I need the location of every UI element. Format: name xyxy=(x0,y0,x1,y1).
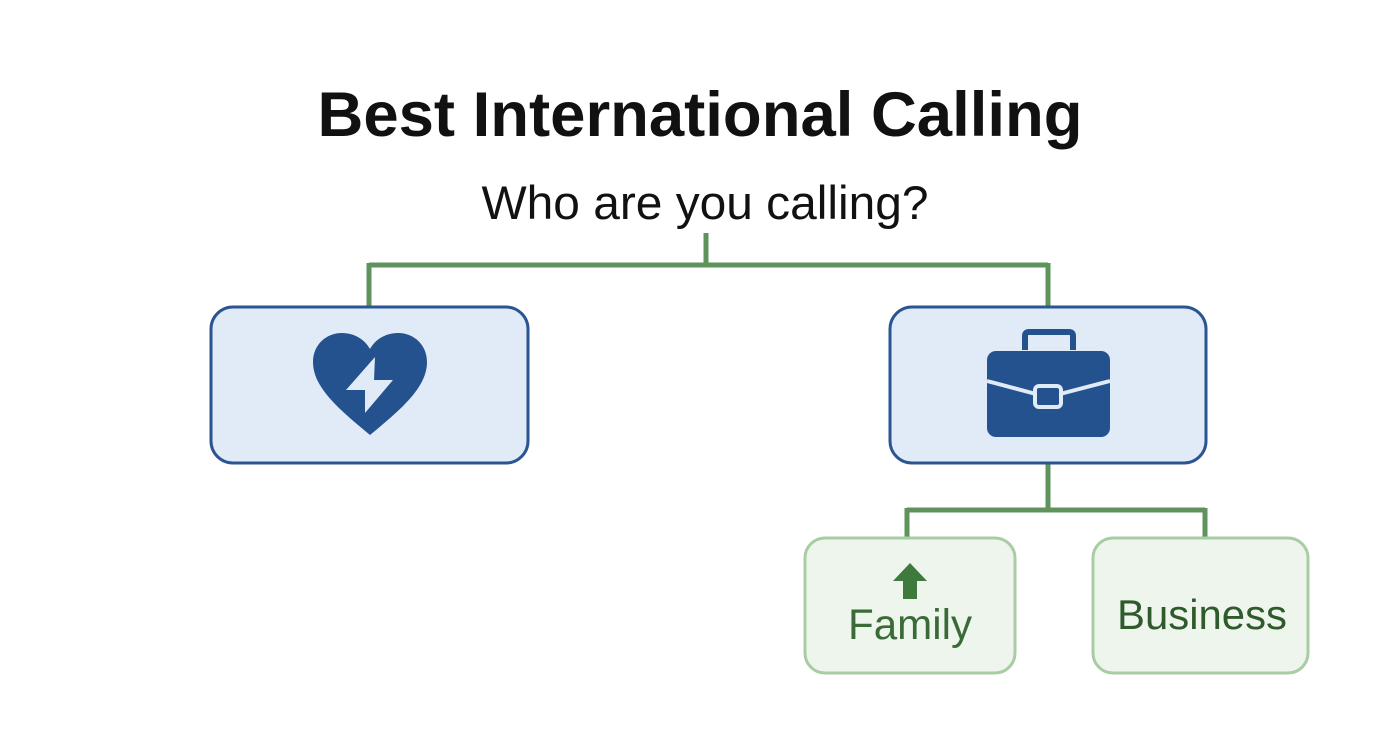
panel: family option xyxy=(805,538,1015,673)
panel: personal (heart) xyxy=(211,307,528,463)
label: Family: Family xyxy=(848,601,972,649)
panel: business option xyxy=(1093,538,1308,673)
icon: briefcase xyxy=(987,332,1110,437)
icon: heart with lightning xyxy=(313,333,427,435)
title: Best International Calling xyxy=(318,80,1082,150)
icon: up arrow xyxy=(893,563,927,599)
connector: lower tree xyxy=(907,461,1205,540)
connector: top tree xyxy=(369,233,1048,308)
subtitle question: Who are you calling? xyxy=(482,176,928,229)
label: Business: Business xyxy=(1117,591,1287,638)
panel: business (briefcase) xyxy=(890,307,1206,463)
